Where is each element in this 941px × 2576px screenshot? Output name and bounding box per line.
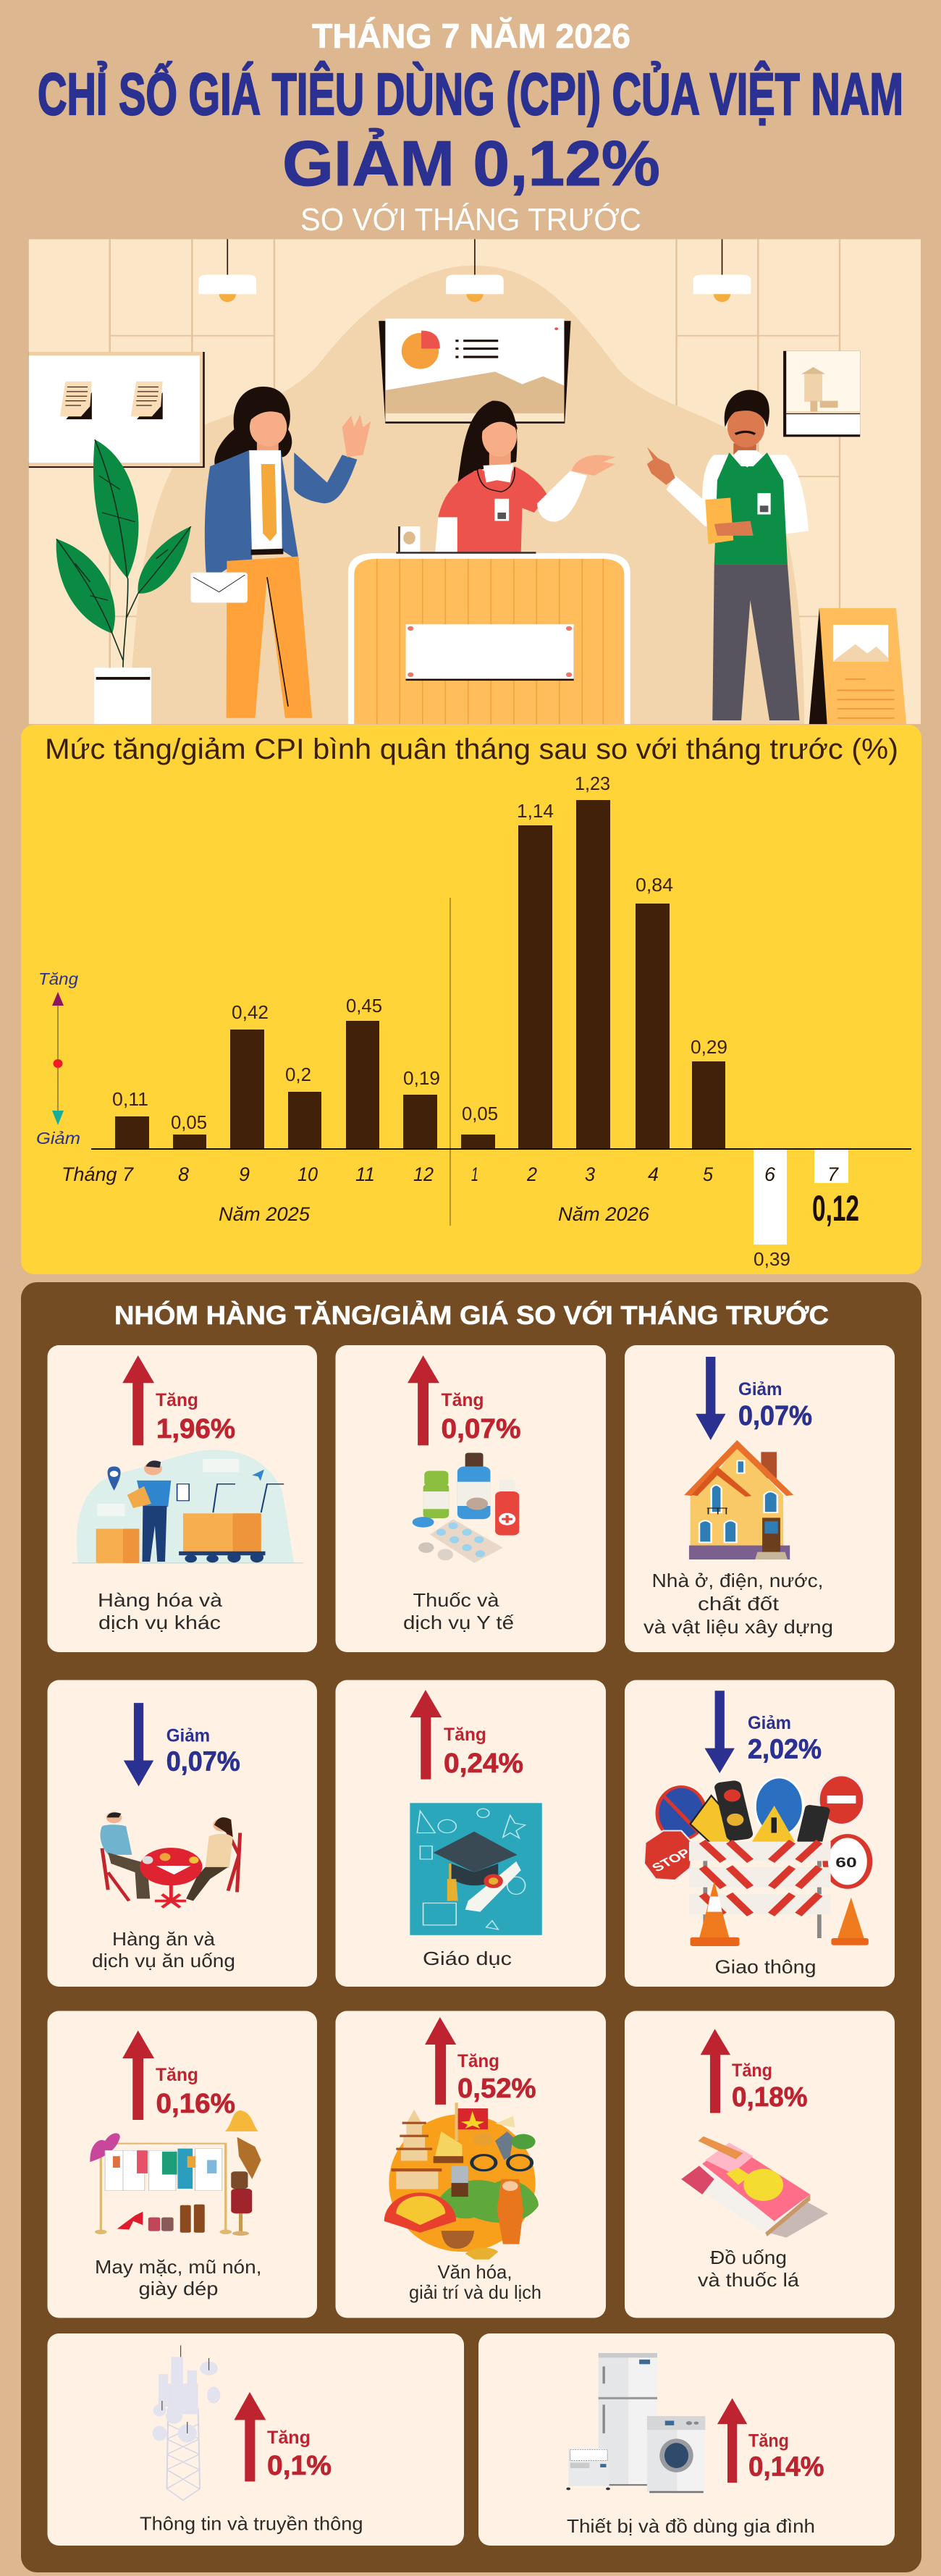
icon: road signs and barrier: 60 [835, 1854, 857, 1870]
card: Thông tin và truyền thông [48, 2333, 464, 2546]
bar chart: 1,23 [575, 773, 610, 794]
label [403, 1589, 515, 1633]
bar chart: 10 [298, 1163, 318, 1185]
icon: road signs and barrier [644, 1775, 870, 1946]
arrow up [425, 2017, 456, 2105]
icon: logistics worker [72, 1449, 303, 1563]
arrow down [704, 1691, 735, 1773]
arrow down [124, 1703, 153, 1786]
icon: clothing rack [90, 2110, 261, 2236]
card: Đồ uống và thuốc lá [625, 2011, 895, 2318]
label [98, 1589, 223, 1633]
value: 0,52% [457, 2074, 536, 2104]
chart title: Mức tăng/giảm CPI bình quân tháng sau so với tháng trước (%) [45, 733, 898, 765]
label: Giao thông [715, 1956, 816, 1978]
legend: direction arrow [36, 969, 80, 1148]
card: Thuốc và dịch vụ Y tế [336, 1345, 606, 1652]
arrow up [410, 1690, 442, 1780]
card: Hàng hóa và dịch vụ khác [48, 1345, 317, 1652]
card: Văn hóa, giải trí và du lịch [336, 2011, 606, 2318]
value [748, 2431, 824, 2483]
bar chart: 9 [239, 1163, 250, 1185]
value [166, 1726, 240, 1777]
label: May mặc, mũ nón, [95, 2256, 262, 2278]
icon: medicine [413, 1453, 519, 1563]
label: dịch vụ khác [98, 1612, 221, 1633]
bar chart [62, 773, 911, 1270]
bar chart: 0,05 [462, 1103, 498, 1124]
notice board [29, 352, 205, 468]
bar chart: 8 [178, 1163, 189, 1185]
lamps [198, 239, 751, 302]
A-frame sign [809, 608, 906, 724]
bar chart: 4 [648, 1163, 659, 1185]
icon: road signs and barrier: STOP [649, 1847, 693, 1874]
card: May mặc, mũ nón, giày dép [48, 2011, 317, 2318]
arrow up [701, 2029, 730, 2113]
value: 0,18% [732, 2082, 808, 2113]
label [409, 2261, 541, 2303]
arrow up [234, 2392, 266, 2481]
value: Tăng [457, 2051, 499, 2071]
label: dịch vụ Y tế [403, 1612, 515, 1633]
value [732, 2061, 808, 2113]
title block [38, 17, 903, 237]
woman in red shirt [399, 401, 615, 552]
panel: CPI monthly chart [21, 725, 921, 1274]
arrow up [408, 1355, 439, 1445]
label [95, 2256, 262, 2299]
label: Hàng hóa và [98, 1589, 223, 1611]
icon: graduation cap [410, 1803, 542, 1935]
date heading: THÁNG 7 NĂM 2026 [312, 17, 630, 55]
value: Giảm [166, 1726, 210, 1746]
value [156, 1390, 235, 1444]
value: 1,96% [156, 1414, 235, 1444]
value [267, 2428, 332, 2481]
arrow up [717, 2398, 747, 2483]
value: 0,16% [156, 2089, 235, 2119]
value: Tăng [156, 2065, 198, 2085]
panel: commodity groups [21, 1282, 921, 2572]
icon: telecom tower [153, 2346, 220, 2500]
label: giải trí và du lịch [409, 2281, 541, 2303]
label [698, 2247, 800, 2291]
arrow down [696, 1357, 726, 1440]
woman in blue blazer [191, 387, 371, 718]
value [738, 1379, 812, 1431]
icon: cigarette box [681, 2137, 828, 2238]
value: Tăng [732, 2061, 772, 2081]
value: 0,07% [738, 1401, 812, 1431]
bar chart: 6 [764, 1163, 776, 1185]
bar chart: 3 [585, 1163, 595, 1185]
reception counter [348, 552, 630, 724]
value [748, 1713, 822, 1765]
bar chart: 0,45 [346, 995, 382, 1016]
bar chart: Năm 2025 [219, 1203, 311, 1225]
bar chart: 0,42 [232, 1001, 269, 1023]
section heading: NHÓM HÀNG TĂNG/GIẢM GIÁ SO VỚI THÁNG TRƯỚC [114, 1300, 829, 1330]
label: dịch vụ ăn uống [92, 1950, 235, 1971]
bar chart: Tháng 7 [62, 1163, 134, 1185]
card: Giao thông [625, 1680, 895, 1987]
value: Tăng [267, 2428, 311, 2448]
card: Hàng ăn và dịch vụ ăn uống [48, 1680, 317, 1987]
value: 0,14% [748, 2452, 824, 2483]
card: Thiết bị và đồ dùng gia đình [478, 2333, 895, 2546]
value: Tăng [444, 1725, 486, 1745]
icon: Vietnamese culture [384, 2103, 539, 2260]
label [92, 1928, 235, 1971]
value [457, 2051, 536, 2104]
legend: direction arrow: Giảm [36, 1129, 80, 1148]
card: Nhà ở, điện, nước [625, 1345, 895, 1652]
value: Giảm [748, 1713, 791, 1733]
bar chart: 0,05 [171, 1111, 207, 1133]
label: Hàng ăn và [112, 1928, 216, 1950]
subtitle: SO VỚI THÁNG TRƯỚC [300, 202, 641, 237]
bar chart: 0,19 [403, 1067, 440, 1089]
arrow up [122, 2030, 154, 2120]
wall screen with pie chart [379, 319, 571, 424]
bar chart: Năm 2026 [558, 1203, 650, 1225]
value [156, 2065, 235, 2119]
illustration: staff at service counter [29, 239, 921, 724]
legend: direction arrow: Tăng [38, 969, 78, 988]
bar chart: 0,84 [636, 874, 673, 896]
label: Thông tin và truyền thông [140, 2512, 363, 2534]
label [643, 1570, 833, 1638]
label: Thuốc và [413, 1589, 499, 1611]
bar chart: 1 [471, 1163, 478, 1185]
headline figure: GIẢM 0,12% [282, 127, 660, 199]
value: Tăng [156, 1390, 198, 1410]
label: Đồ uống [710, 2247, 787, 2268]
bar chart: 0,11 [112, 1088, 148, 1110]
bar chart: 11 [355, 1163, 375, 1185]
label: Văn hóa, [437, 2261, 512, 2283]
value: 0,1% [267, 2451, 332, 2481]
value: 0,07% [442, 1414, 521, 1444]
card: Giáo dục [336, 1680, 606, 1987]
label: Giáo dục [423, 1948, 512, 1969]
icon: house [684, 1440, 793, 1560]
bar chart: 0,12 [812, 1188, 859, 1229]
potted plant [56, 439, 191, 724]
bar chart: 2 [526, 1163, 537, 1185]
value: Tăng [442, 1390, 484, 1410]
value: Giảm [738, 1379, 782, 1399]
bar chart: 0,29 [691, 1036, 727, 1058]
bar chart: 7 [827, 1163, 839, 1185]
label: chất đốt [698, 1593, 780, 1615]
label: và thuốc lá [698, 2269, 800, 2291]
arrow up [122, 1355, 154, 1445]
label: Thiết bị và đồ dùng gia đình [567, 2515, 815, 2537]
bar chart: 1,14 [517, 800, 554, 822]
man in green vest [647, 390, 809, 720]
bar chart: 0,39 [754, 1248, 790, 1270]
value: 0,07% [166, 1746, 240, 1777]
value [442, 1390, 521, 1444]
icon: couple dining [100, 1811, 240, 1908]
bar chart: 5 [703, 1163, 714, 1185]
framed picture [783, 351, 860, 437]
label: Nhà ở, điện, nước, [651, 1570, 824, 1591]
value: 0,24% [444, 1748, 523, 1779]
icon: home appliances [566, 2353, 705, 2493]
value [444, 1725, 523, 1779]
label: và vật liệu xây dựng [643, 1616, 833, 1638]
bar chart: 0,2 [285, 1064, 311, 1085]
bar chart: 12 [413, 1163, 434, 1185]
value: 2,02% [748, 1735, 822, 1765]
label: giày dép [139, 2278, 219, 2299]
value: Tăng [748, 2431, 789, 2451]
